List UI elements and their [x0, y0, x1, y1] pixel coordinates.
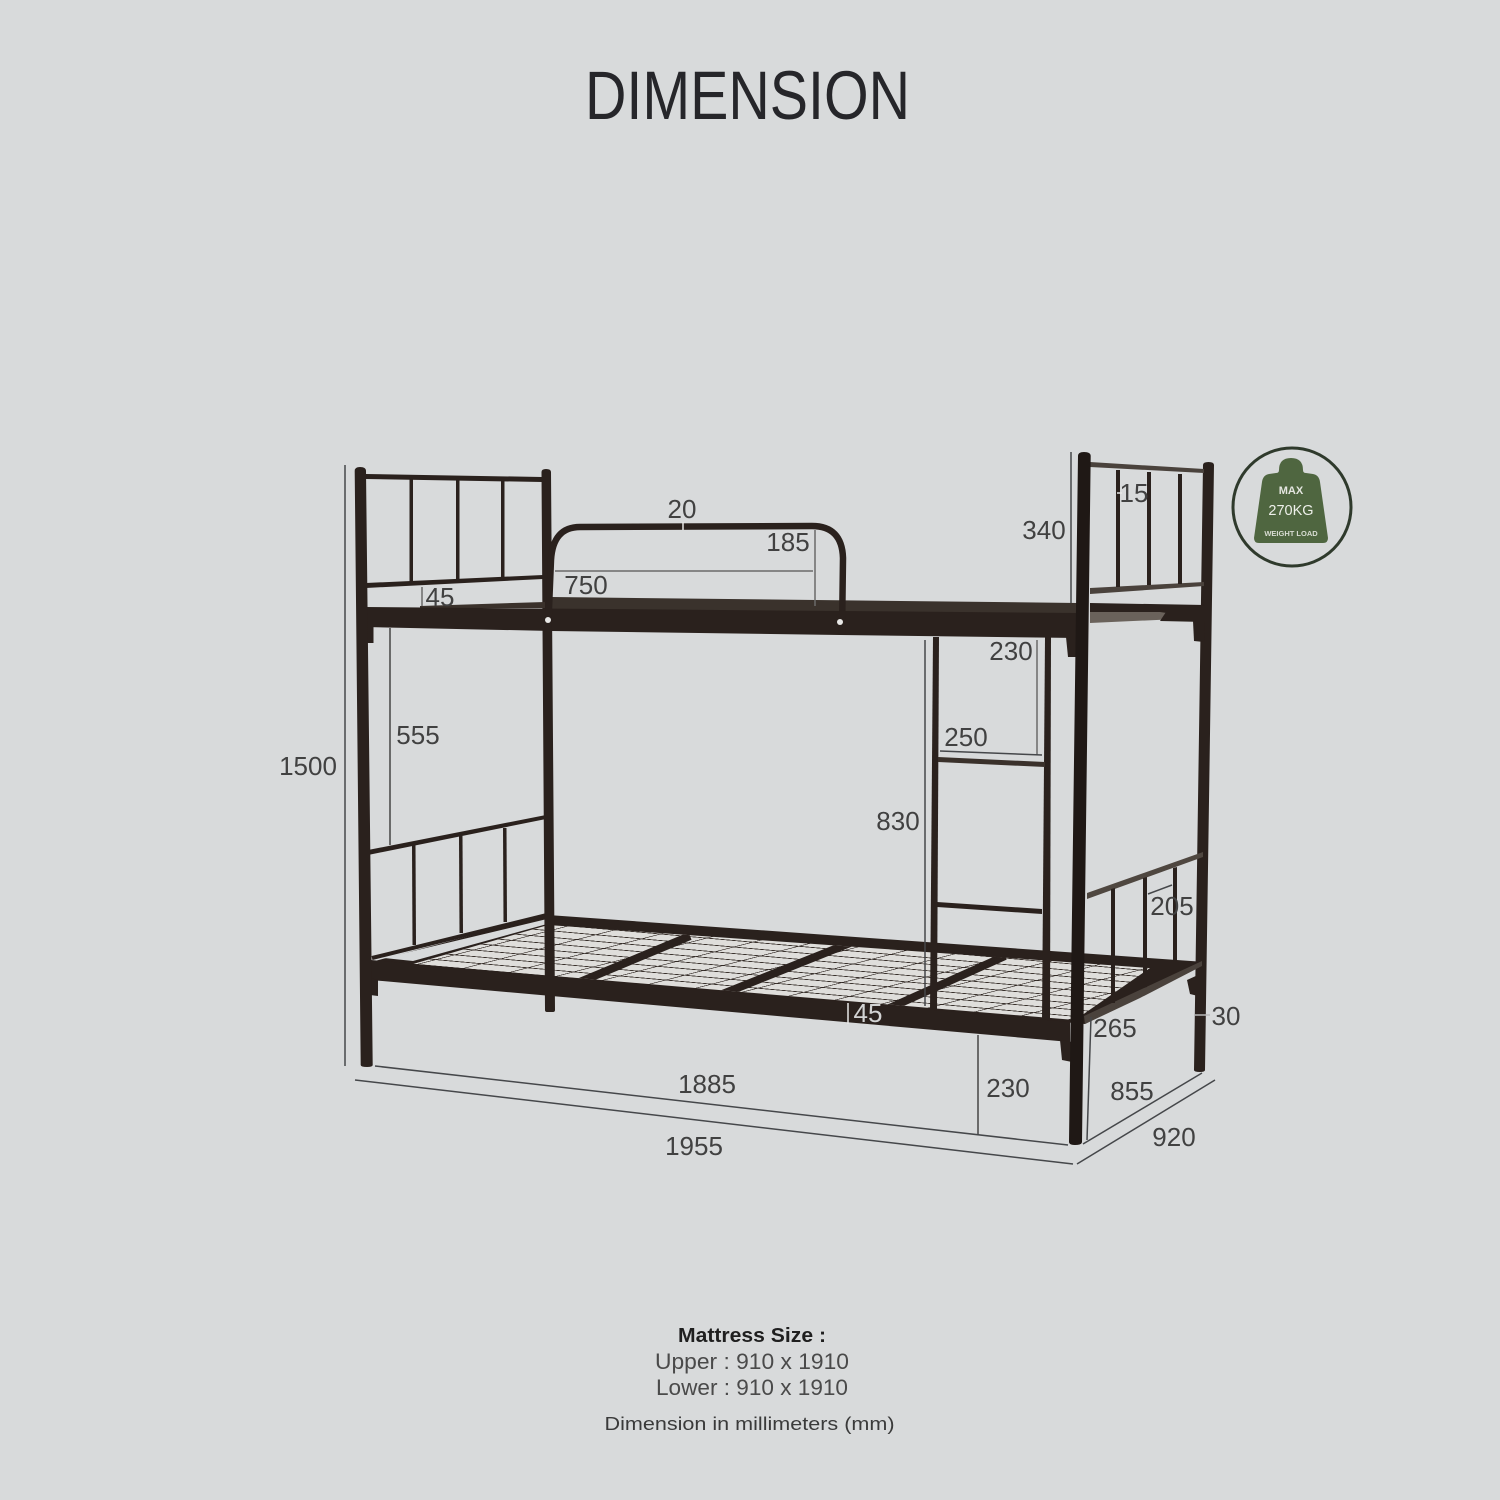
dimension labels: 265 — [1093, 1013, 1137, 1043]
upper deck side rail — [365, 597, 1079, 657]
mattress size text: Mattress Size : — [678, 1325, 826, 1347]
dimension labels: 830 — [876, 806, 920, 836]
dimension labels: 15 — [1120, 478, 1148, 508]
lower bracket right — [1060, 1040, 1072, 1062]
dimension labels — [279, 478, 1240, 1161]
mattress size text — [604, 1325, 894, 1434]
front right post — [1069, 452, 1091, 1145]
lower deck mesh — [371, 915, 1205, 1024]
ladder — [930, 637, 1051, 1022]
dimension labels: 920 — [1152, 1122, 1196, 1152]
dimension labels: 340 — [1022, 515, 1066, 545]
mattress size text: Upper : 910 x 1910 — [655, 1349, 849, 1374]
dimension labels: 20 — [668, 494, 696, 524]
dimension labels: 45 — [854, 998, 882, 1028]
dimension labels: 230 — [986, 1073, 1030, 1103]
lower far bracket — [1187, 975, 1198, 996]
lower left headboard — [368, 815, 546, 945]
lower bracket left — [370, 978, 378, 996]
back left post — [542, 469, 555, 1012]
dimension labels: 555 — [396, 720, 440, 750]
mattress size text: Dimension in millimeters (mm) — [604, 1413, 894, 1434]
lower deck front rail — [371, 960, 1070, 1042]
lower right footboard — [1084, 852, 1203, 1024]
dimension lines — [345, 452, 1215, 1164]
dimension labels: 1500 — [279, 751, 337, 781]
max weight badge — [1233, 448, 1351, 566]
dimension labels: 1955 — [665, 1131, 723, 1161]
back right post — [1194, 462, 1214, 1072]
dimension labels: 855 — [1110, 1076, 1154, 1106]
max weight badge: WEIGHT LOAD — [1264, 529, 1318, 538]
dimension labels: 230 — [989, 636, 1033, 666]
max weight badge: 270KG — [1268, 503, 1314, 519]
upper left headboard — [366, 474, 543, 588]
dimension labels: 205 — [1150, 891, 1194, 921]
front left post — [355, 467, 373, 1067]
dimension labels: 250 — [944, 722, 988, 752]
dimension labels: 30 — [1212, 1001, 1240, 1031]
icon: weight — [1254, 458, 1328, 543]
mattress size text: Lower : 910 x 1910 — [656, 1375, 848, 1400]
dimension labels: 45 — [426, 582, 454, 612]
dimension labels: 185 — [766, 527, 810, 557]
max weight badge: MAX — [1279, 485, 1304, 497]
upper deck far end rail — [1090, 603, 1205, 642]
dimension labels: 1885 — [678, 1069, 736, 1099]
guard rail — [545, 526, 843, 634]
title: DIMENSION — [585, 57, 910, 134]
dimension labels: 750 — [564, 570, 608, 600]
upper right headboard — [1090, 462, 1204, 594]
bunk bed illustration — [355, 452, 1214, 1145]
